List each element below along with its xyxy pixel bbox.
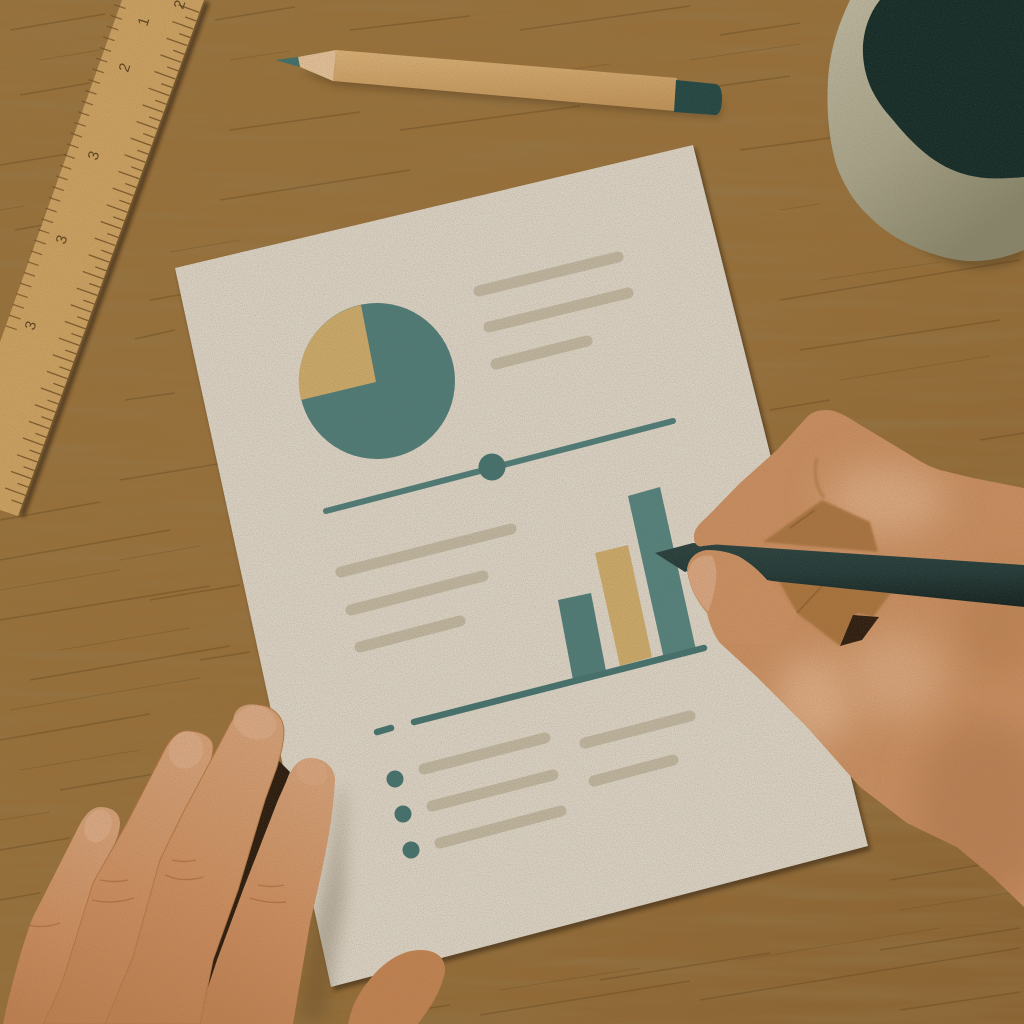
ruler numerals: 3 bbox=[22, 319, 40, 332]
fingers below pen in shade bbox=[777, 578, 893, 646]
timeline slider bbox=[326, 421, 673, 511]
thumb bbox=[348, 950, 445, 1024]
fingernails bbox=[79, 699, 331, 847]
fingers above pen in shade bbox=[763, 500, 878, 552]
text lines: top bbox=[479, 257, 628, 364]
pie chart bbox=[299, 303, 455, 459]
ring finger bbox=[43, 731, 213, 1024]
pencil body bbox=[333, 50, 677, 111]
coffee mug bbox=[827, 0, 1024, 269]
coffee surface bbox=[863, 0, 1024, 178]
index fingertip over pen bbox=[694, 495, 730, 546]
thumbnail bbox=[688, 556, 716, 612]
ruler numerals: 2 bbox=[116, 61, 134, 74]
finger lines bbox=[790, 510, 822, 613]
hand shadow on paper bbox=[298, 790, 345, 1020]
ruler numerals: 1 bbox=[135, 15, 153, 28]
knuckle creases bbox=[28, 860, 286, 927]
chart axis bbox=[414, 648, 704, 722]
bullet list bbox=[386, 716, 690, 858]
mug body bbox=[827, 0, 1024, 261]
ruler numerals: 3 bbox=[85, 149, 103, 162]
ruler numerals bbox=[22, 0, 189, 332]
index finger bbox=[195, 758, 335, 1024]
ruler numerals: 3 bbox=[53, 233, 71, 246]
pinky finger bbox=[3, 807, 120, 1024]
palm and fingers bbox=[680, 400, 1024, 920]
pencil tip bbox=[275, 57, 300, 67]
ruler tick marks bbox=[8, 6, 194, 508]
gap shadow between fingers bbox=[200, 760, 290, 995]
eraser cap bbox=[674, 80, 722, 115]
sharpened cone bbox=[298, 50, 336, 81]
left hand bbox=[3, 699, 445, 1024]
right hand with pen bbox=[655, 400, 1024, 920]
thumb bbox=[687, 550, 797, 645]
bar chart bbox=[377, 487, 704, 732]
paper sheet bbox=[175, 145, 871, 991]
text lines: middle bbox=[341, 529, 511, 647]
gap between fingers bbox=[840, 615, 879, 646]
pen bbox=[655, 543, 1024, 607]
ruler bbox=[0, 0, 207, 516]
pencil bbox=[275, 50, 722, 118]
middle finger bbox=[105, 705, 284, 1024]
